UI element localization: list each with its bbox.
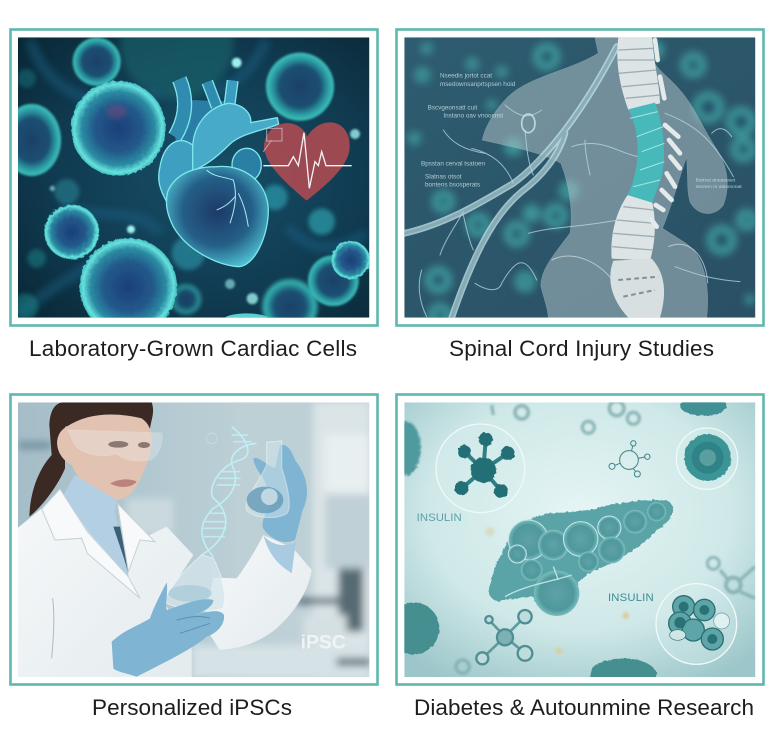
upper glove — [253, 445, 307, 542]
caption: diabetes research: Diabetes & Autounmine Research — [414, 695, 754, 720]
dna helix — [202, 427, 257, 557]
lower flask — [163, 555, 225, 611]
icon: red heart with ecg — [263, 122, 352, 201]
lab background — [18, 402, 370, 679]
garbled annotation labels: Bstrsst aneasoset — [696, 177, 736, 183]
garbled annotation labels: Bpsstan cerval tsatoen — [421, 160, 486, 167]
garbled annotation labels: Nseedis jortot ccat — [440, 72, 492, 79]
illustration: scientist with flask and dna — [18, 402, 370, 679]
spine — [611, 37, 680, 261]
hair and ponytail — [29, 402, 153, 517]
panel: diabetes and autoimmune research — [387, 394, 764, 720]
panel frame — [10, 394, 378, 684]
nerves — [404, 47, 740, 318]
upper flask — [246, 441, 289, 517]
garbled annotation labels: secnen rs vanosonat — [696, 184, 742, 190]
caption: spinal cord: Spinal Cord Injury Studies — [449, 336, 714, 361]
pancreas — [489, 500, 673, 616]
garbled annotation labels: Instano oav vnoosnst — [443, 112, 503, 119]
garbled annotation labels — [421, 72, 742, 190]
label: iPSC: iPSC — [301, 632, 346, 653]
illustration: heart among cells — [18, 37, 370, 318]
caption: personalized iPSCs: Personalized iPSCs — [92, 695, 292, 720]
illustration: pancreas and insulin — [404, 402, 756, 677]
garbled annotation labels: Slatnas otsot — [425, 174, 462, 181]
panel frame — [396, 30, 764, 326]
lights — [50, 58, 360, 304]
face — [57, 415, 152, 500]
icon: anatomical heart — [159, 79, 279, 267]
panel frame — [396, 394, 764, 684]
illustration: spine in translucent torso — [404, 37, 756, 323]
lower glove — [112, 582, 224, 677]
garbled annotation labels: Bscvgeonsatt cuit — [428, 104, 478, 111]
panel: laboratory-grown cardiac cells — [2, 0, 377, 361]
insulin cluster top left — [436, 424, 525, 513]
garbled annotation labels: msedownsanprtspsen hoid — [440, 81, 516, 88]
cell cluster circle bottom right — [656, 584, 737, 664]
lab coat — [18, 490, 193, 677]
neck and shirt — [63, 475, 128, 577]
cell circle top right — [676, 428, 738, 489]
panel frame — [10, 30, 378, 326]
caption: cardiac cells: Laboratory-Grown Cardiac Cells — [29, 336, 357, 361]
blurred background cells — [404, 402, 727, 677]
panel: spinal cord injury studies — [396, 30, 764, 361]
label: insulin left: INSULIN — [417, 512, 462, 524]
torso silhouette — [482, 37, 727, 318]
sleeve — [203, 535, 312, 650]
garbled annotation labels: bontens bsosperats — [425, 182, 480, 189]
panel: personalized iPSCs — [10, 394, 378, 720]
label: insulin right: INSULIN — [608, 592, 654, 604]
molecule outline top — [609, 441, 650, 477]
molecule bottom left — [476, 610, 532, 664]
